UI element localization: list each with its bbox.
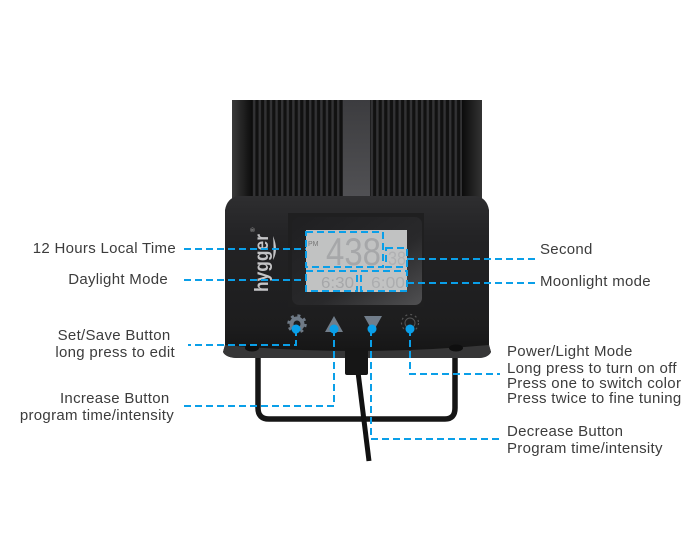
housing lower flange — [223, 345, 491, 358]
LCD screen: 6:30 — [321, 275, 354, 292]
control housing — [223, 196, 491, 358]
label: daylight mode: Daylight Mode — [68, 271, 168, 288]
mounting screws — [245, 344, 463, 352]
label: set/save button: long press to edit — [55, 344, 176, 361]
logo feather — [273, 236, 276, 260]
cooling fins — [252, 100, 462, 197]
light fixture — [223, 100, 491, 461]
label: second: Second — [540, 241, 593, 258]
icon: gear — [288, 316, 306, 332]
label: power/light mode: Press twice to fine tuning — [507, 390, 682, 407]
icon: light bulb — [402, 314, 418, 332]
LCD screen — [306, 230, 407, 292]
LCD screen: 438 — [326, 231, 381, 274]
logo: ® — [250, 227, 257, 232]
label: set/save button: Set/Save Button — [58, 327, 171, 344]
label: 12 hours local time: 12 Hours Local Time — [33, 240, 176, 257]
LCD screen: PM — [308, 241, 319, 248]
bracket — [258, 352, 455, 419]
label: decrease button: Decrease Button — [507, 423, 623, 440]
label: moonlight mode: Moonlight mode — [540, 273, 651, 290]
label: decrease button: Program time/intensity — [507, 440, 663, 457]
heat sink — [232, 100, 482, 200]
label: power/light mode: Power/Light Mode — [507, 343, 633, 360]
label: power/light mode: Long press to turn on off — [507, 360, 677, 377]
icon: down triangle — [364, 316, 382, 332]
label: power/light mode: Press one to switch color — [507, 375, 681, 392]
icon: up triangle — [325, 316, 343, 332]
logo: hygger — [252, 233, 273, 292]
power cable — [345, 348, 369, 461]
LCD recess — [288, 213, 424, 307]
label: increase button: program time/intensity — [20, 407, 174, 424]
LCD bezel — [292, 217, 422, 305]
LCD screen: 38 — [388, 249, 406, 270]
LCD screen: 6:00 — [371, 275, 405, 292]
callout lines — [182, 232, 535, 439]
label: increase button: Increase Button — [60, 390, 170, 407]
